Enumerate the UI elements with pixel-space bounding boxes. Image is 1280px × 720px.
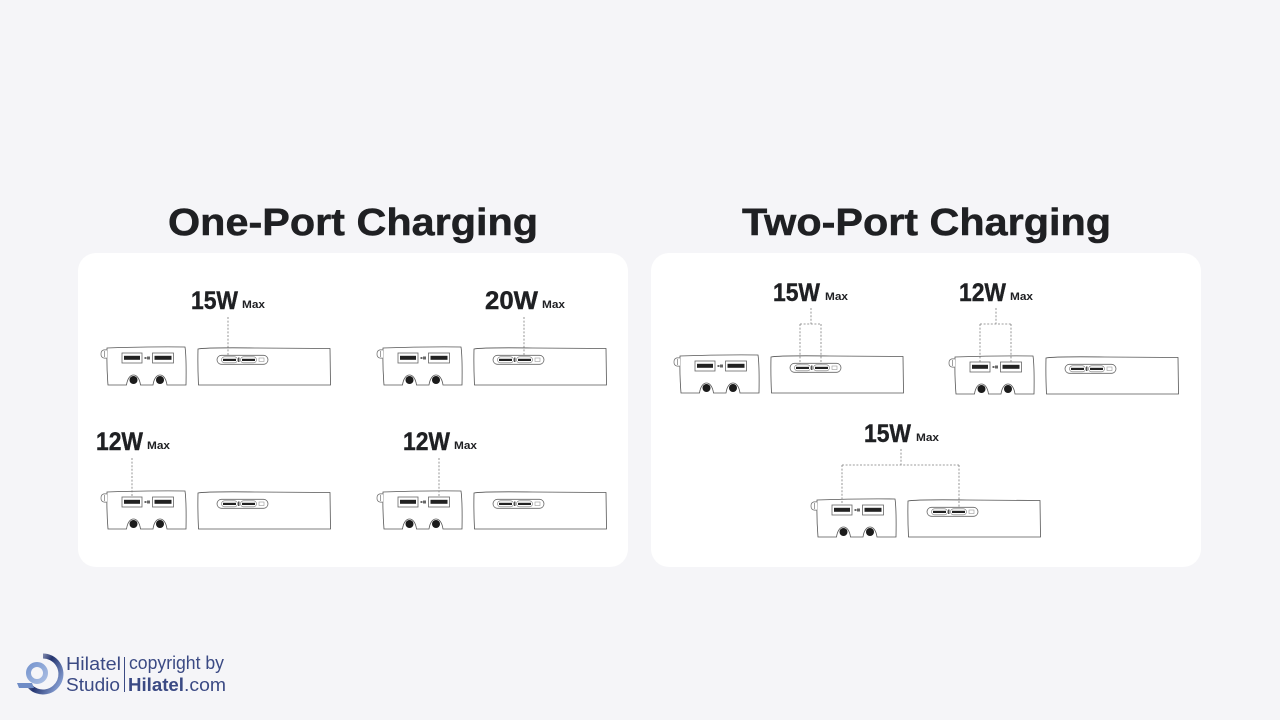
diagram: 12W on USB-A port 1: 12W	[96, 428, 143, 456]
diagram: 15W on USB-A and USB-C ports: Max	[916, 432, 940, 444]
diagram: 12W on USB-A port 1	[96, 428, 330, 529]
heading: Two-Port Charging: Two-Port Charging	[742, 202, 1111, 244]
diagram: 20W on USB-C port 2	[377, 287, 606, 385]
diagram: 15W on USB-C port 1: Max	[242, 299, 266, 311]
diagram: 12W on USB-A port 2: 12W	[403, 428, 450, 456]
diagram: 20W on USB-C port 2: Max	[542, 299, 566, 311]
heading: One-Port Charging: One-Port Charging	[168, 202, 538, 244]
diagram: 12W on both USB-A ports: 12W	[959, 279, 1006, 307]
diagram: 12W on USB-A port 2: Max	[454, 440, 478, 452]
diagram: 15W on both USB-C ports: Max	[825, 291, 849, 303]
diagram: 15W on USB-A and USB-C ports	[811, 420, 1040, 537]
diagram: 15W on USB-C port 1	[101, 287, 330, 385]
logo text	[66, 653, 226, 695]
diagram: 15W on USB-C port 1: 15W	[191, 287, 238, 315]
diagram: 20W on USB-C port 2: 20W	[485, 287, 538, 315]
logo text: Hilatel	[66, 654, 121, 674]
diagram: 15W on both USB-C ports	[674, 279, 904, 393]
diagram: 15W on both USB-C ports: 15W	[773, 279, 820, 307]
diagram: 12W on both USB-A ports: Max	[1010, 291, 1034, 303]
logo text: Studio	[66, 675, 120, 695]
diagram: 12W on USB-A port 2	[377, 428, 606, 529]
diagram: 12W on both USB-A ports	[949, 279, 1178, 394]
logo text: .com	[184, 675, 226, 695]
panel: one-port charging	[78, 253, 628, 567]
panel: two-port charging	[651, 253, 1201, 567]
diagram: 12W on USB-A port 1: Max	[147, 440, 171, 452]
diagram: 15W on USB-A and USB-C ports: 15W	[864, 420, 911, 448]
logo: Hilatel Studio	[17, 653, 226, 695]
logo text: copyright by	[129, 653, 224, 673]
logo text: Hilatel	[128, 675, 184, 695]
icon: ring mark	[17, 656, 61, 692]
